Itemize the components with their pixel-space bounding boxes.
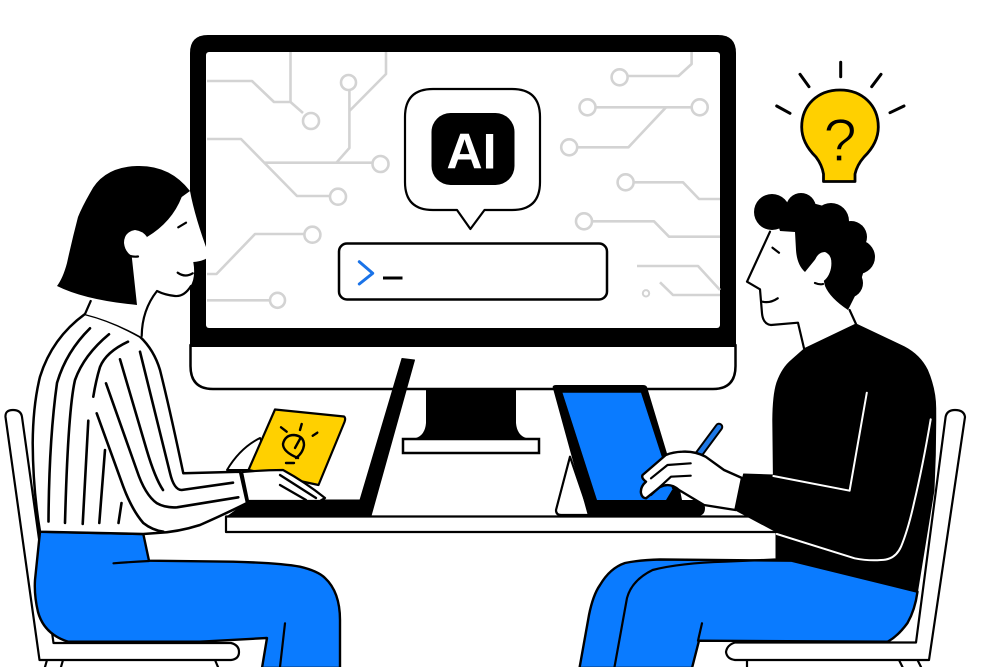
man: [580, 193, 936, 667]
light bulb with question mark: [777, 62, 904, 181]
man's neck and face: [747, 232, 856, 348]
woman's hand: [242, 470, 325, 501]
woman's trousers: [35, 532, 340, 667]
man's black sweater: [735, 324, 936, 592]
woman's ear: [124, 230, 147, 256]
man's ear: [813, 252, 831, 282]
woman: [33, 166, 340, 667]
woman's face and neck: [85, 191, 209, 337]
speech bubble with AI badge: AI: [446, 124, 496, 180]
right chair: [726, 410, 965, 667]
desk: [226, 516, 780, 532]
left chair: [5, 410, 239, 667]
man's trousers: [580, 560, 918, 667]
right tablet on stand: [553, 385, 705, 516]
speech bubble with AI badge: [405, 89, 540, 229]
command prompt input box: [339, 244, 607, 300]
stylus pen: [699, 427, 719, 454]
woman's striped sweater: [33, 314, 247, 534]
man's hair: [754, 193, 875, 310]
pen tip below hand: [666, 490, 682, 500]
man's hand: [641, 452, 742, 510]
woman's hair: [57, 166, 190, 305]
monitor: [190, 35, 736, 389]
woman's eye and smile: [130, 223, 193, 276]
monitor stand: [403, 387, 539, 453]
circuit pattern on screen: [207, 52, 720, 308]
light bulb with question mark: ?: [823, 107, 857, 174]
yellow tablet with bulb icon: [227, 410, 345, 485]
left laptop: [228, 358, 414, 516]
man's eye and smile: [762, 248, 823, 302]
